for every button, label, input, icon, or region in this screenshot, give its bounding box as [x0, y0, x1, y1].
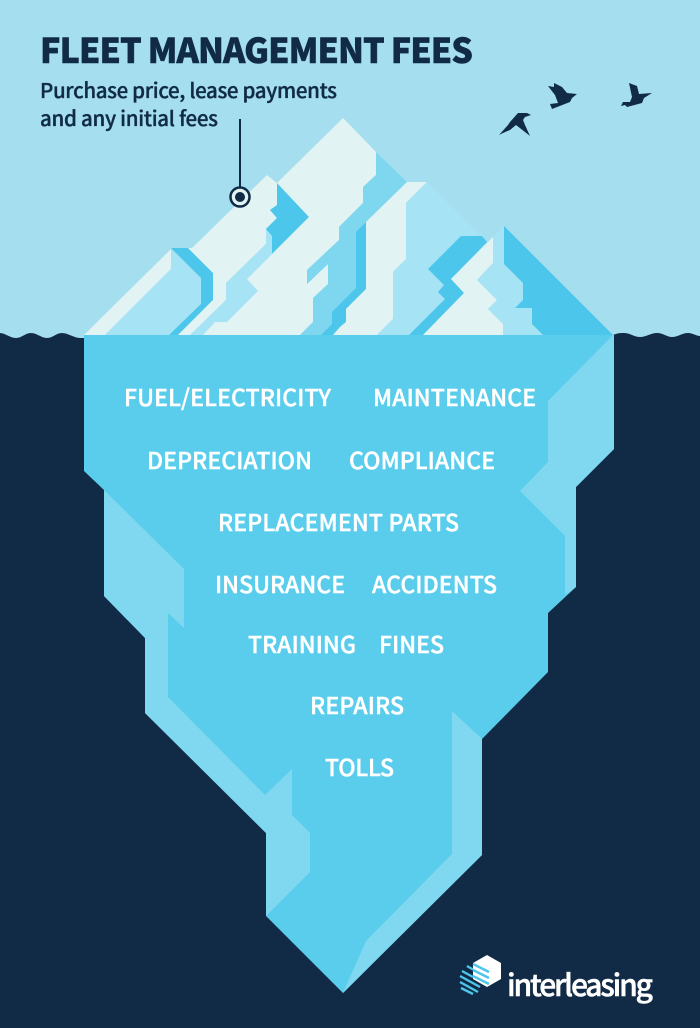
cost labels: INSURANCE: [215, 566, 345, 600]
cost labels: TOLLS: [325, 749, 394, 783]
logo: interleasing: interleasing: [507, 961, 653, 1005]
iceberg above water: [84, 118, 613, 335]
cost labels: FUEL/ELECTRICITY: [124, 379, 331, 413]
callout pointer: [230, 119, 250, 206]
cost labels: [124, 379, 536, 783]
cost labels: ACCIDENTS: [372, 566, 497, 600]
icon: birds: [499, 83, 652, 136]
cost labels: FINES: [379, 626, 444, 660]
cost labels: COMPLIANCE: [349, 442, 495, 476]
sky background: [0, 0, 700, 345]
cost labels: DEPRECIATION: [147, 442, 312, 476]
subtitle: and any initial fees: [40, 102, 218, 132]
subtitle: Purchase price, lease payments: [40, 74, 337, 104]
cost labels: TRAINING: [248, 626, 356, 660]
sea with wavy surface: [0, 333, 700, 1028]
cost labels: REPLACEMENT PARTS: [218, 504, 459, 538]
title: FLEET MANAGEMENT FEES: [40, 24, 473, 73]
cost labels: REPAIRS: [310, 687, 404, 721]
subtitle: [40, 74, 337, 132]
cost labels: MAINTENANCE: [373, 379, 536, 413]
logo: interleasing: [460, 955, 653, 1005]
iceberg below water: [84, 335, 614, 993]
